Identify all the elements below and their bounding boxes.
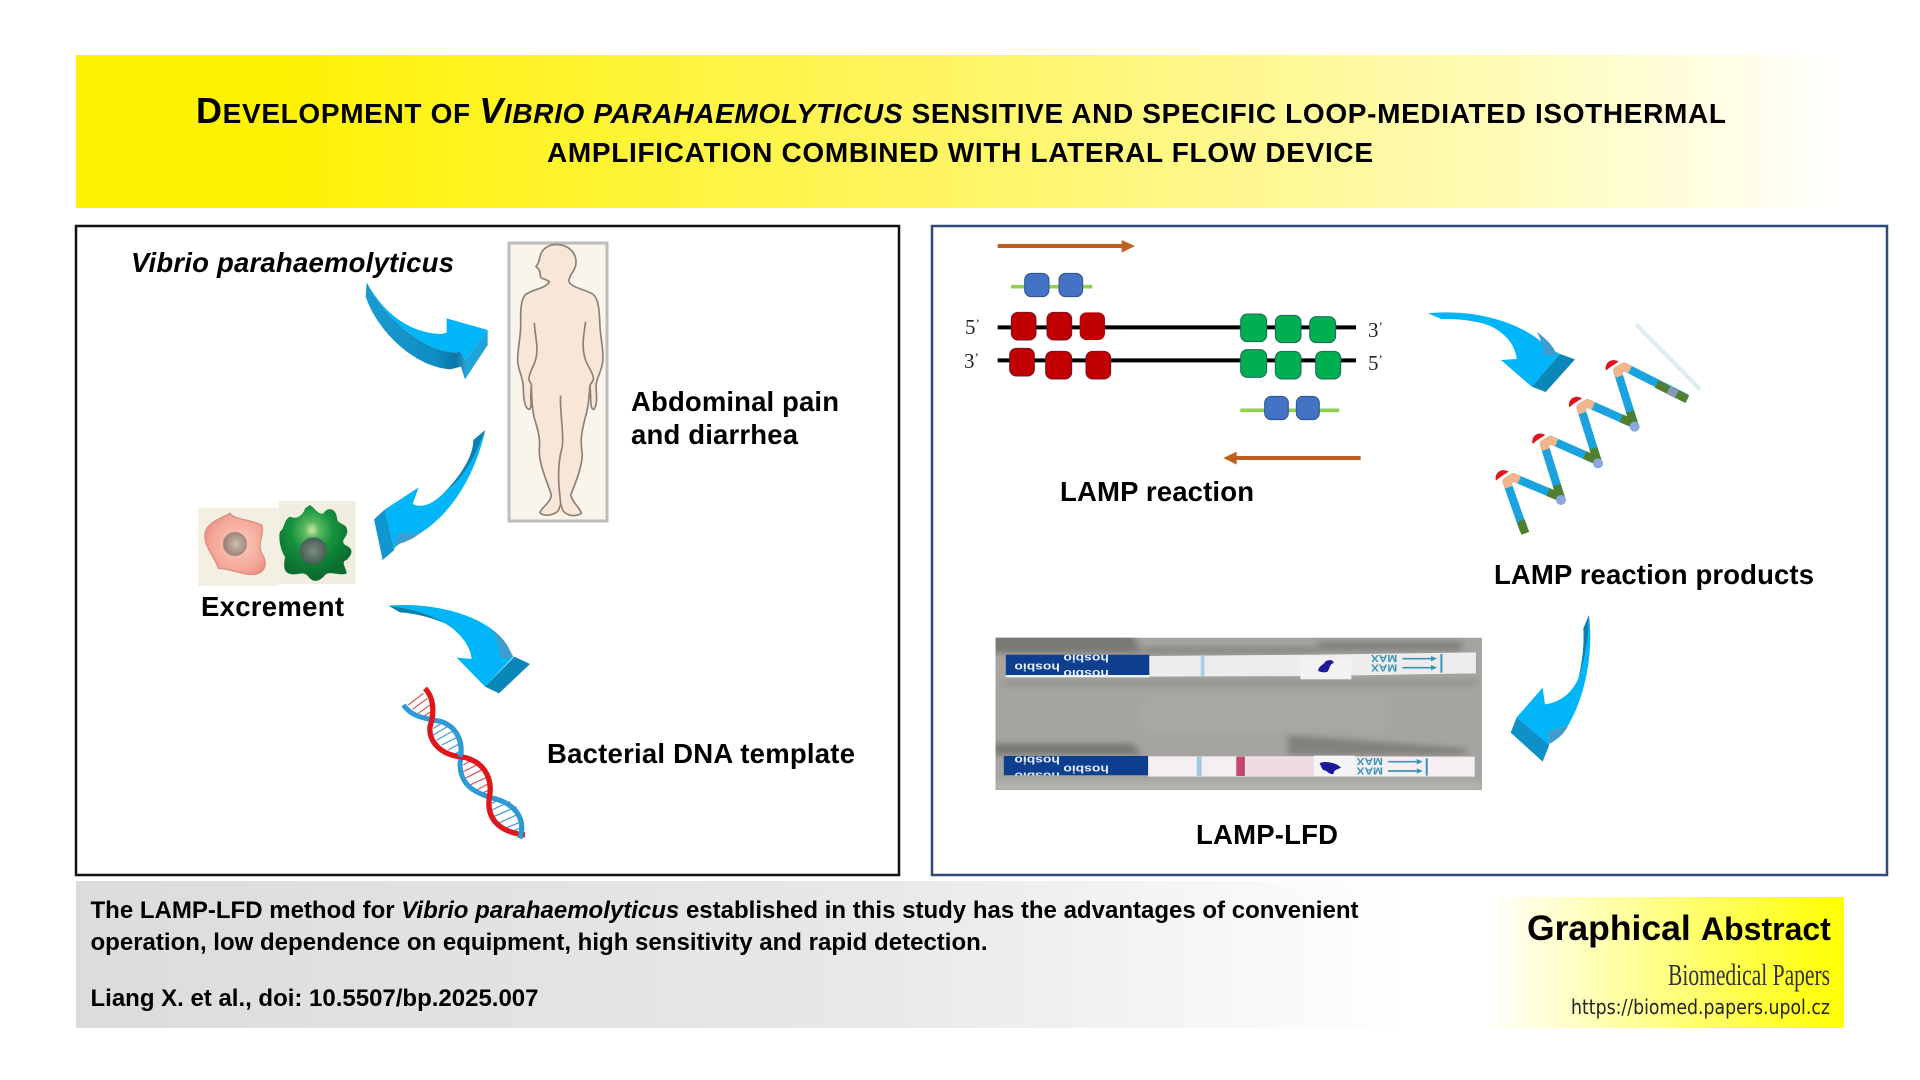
arrow: to LAMP products — [1428, 312, 1575, 392]
badge heading: Abstract — [1701, 911, 1831, 947]
panel: infection pathway — [76, 226, 899, 875]
arrow: reverse primer direction — [1223, 452, 1361, 465]
icon: LAMP products zigzag — [1496, 324, 1700, 533]
label: Abdominal pain and diarrhea: Abdominal pain — [631, 386, 839, 417]
top test strip: MAX — [1370, 652, 1397, 663]
strand end labels — [964, 315, 1383, 375]
badge heading: Graphical — [1527, 908, 1691, 948]
bottom test strip: hosbio — [1014, 754, 1060, 767]
bottom test strip: MAX — [1356, 755, 1383, 766]
strand end labels: ’ — [976, 316, 980, 331]
label: LAMP reaction products: LAMP reaction products — [1494, 559, 1814, 590]
top test strip: hosbio — [1014, 661, 1060, 673]
arrow: to body — [366, 282, 488, 379]
label: LAMP-LFD: LAMP-LFD — [1196, 819, 1338, 850]
label: Abdominal pain and diarrhea: and diarrhea — [631, 419, 799, 450]
title banner — [76, 55, 1840, 208]
diagram: LAMP primers and target strands — [998, 240, 1361, 465]
label: Excrement: Excrement — [201, 591, 344, 622]
strand end labels: ’ — [1378, 352, 1383, 367]
label: Bacterial DNA template: Bacterial DNA template — [547, 738, 855, 769]
strand end labels: 3 — [964, 349, 974, 373]
icon: human body — [509, 243, 607, 521]
bottom test strip: hosbio — [1063, 763, 1109, 775]
strand one — [998, 312, 1356, 343]
arrow: forward primer direction — [998, 240, 1135, 253]
label: LAMP reaction: LAMP reaction — [1060, 476, 1254, 507]
arrow: to DNA — [388, 605, 530, 693]
photo: lateral flow strips — [988, 633, 1482, 792]
top test strip: MAX — [1370, 662, 1397, 672]
title line 2: AMPLIFICATION COMBINED WITH LATERAL FLOW DEVICE — [547, 137, 1373, 168]
bottom test strip: hosbio — [1014, 770, 1060, 783]
journal url: https://biomed.papers.upol.cz — [1571, 995, 1830, 1019]
title line 1: DEVELOPMENT OF VIBRIO PARAHAEMOLYTICUS SENSITIVE AND SPECIFIC LOOP-MEDIATED ISOTHERMAL — [196, 90, 1726, 131]
strand two — [998, 348, 1356, 379]
top test strip — [1006, 652, 1476, 680]
conclusion text line 1: The LAMP-LFD method for Vibrio parahaemolyticus established in this study has the advantages of convenient — [90, 897, 1358, 924]
strand end labels: ’ — [974, 350, 979, 365]
label: Vibrio parahaemolyticus: Vibrio parahaemolyticus — [131, 247, 454, 278]
arrow: to LAMP-LFD strip — [1511, 615, 1590, 762]
strand end labels: ’ — [1378, 319, 1383, 334]
journal name: Biomedical Papers — [1668, 957, 1830, 992]
bottom test strip — [1004, 754, 1475, 783]
icon: excrement cells — [198, 501, 356, 586]
panel: LAMP-LFD detection — [932, 226, 1887, 875]
top test strip: hosbio — [1063, 652, 1109, 665]
strand end labels: 5 — [1368, 351, 1378, 375]
strand end labels: 3 — [1368, 318, 1378, 342]
conclusion box — [76, 881, 1406, 1028]
arrow: to excrement — [374, 430, 485, 560]
strand end labels: 5 — [965, 315, 976, 339]
journal badge — [1488, 897, 1844, 1028]
label: Abdominal pain and diarrhea — [631, 386, 839, 450]
lower primer beads — [1240, 396, 1339, 420]
bottom test strip: MAX — [1356, 765, 1383, 775]
icon: DNA helix — [403, 688, 525, 838]
conclusion text line 2: operation, low dependence on equipment, high sensitivity and rapid detection. — [90, 929, 988, 956]
citation: Liang X. et al., doi: 10.5507/bp.2025.007 — [90, 985, 538, 1012]
upper primer beads — [1011, 273, 1092, 297]
top test strip: hosbio — [1063, 667, 1109, 680]
